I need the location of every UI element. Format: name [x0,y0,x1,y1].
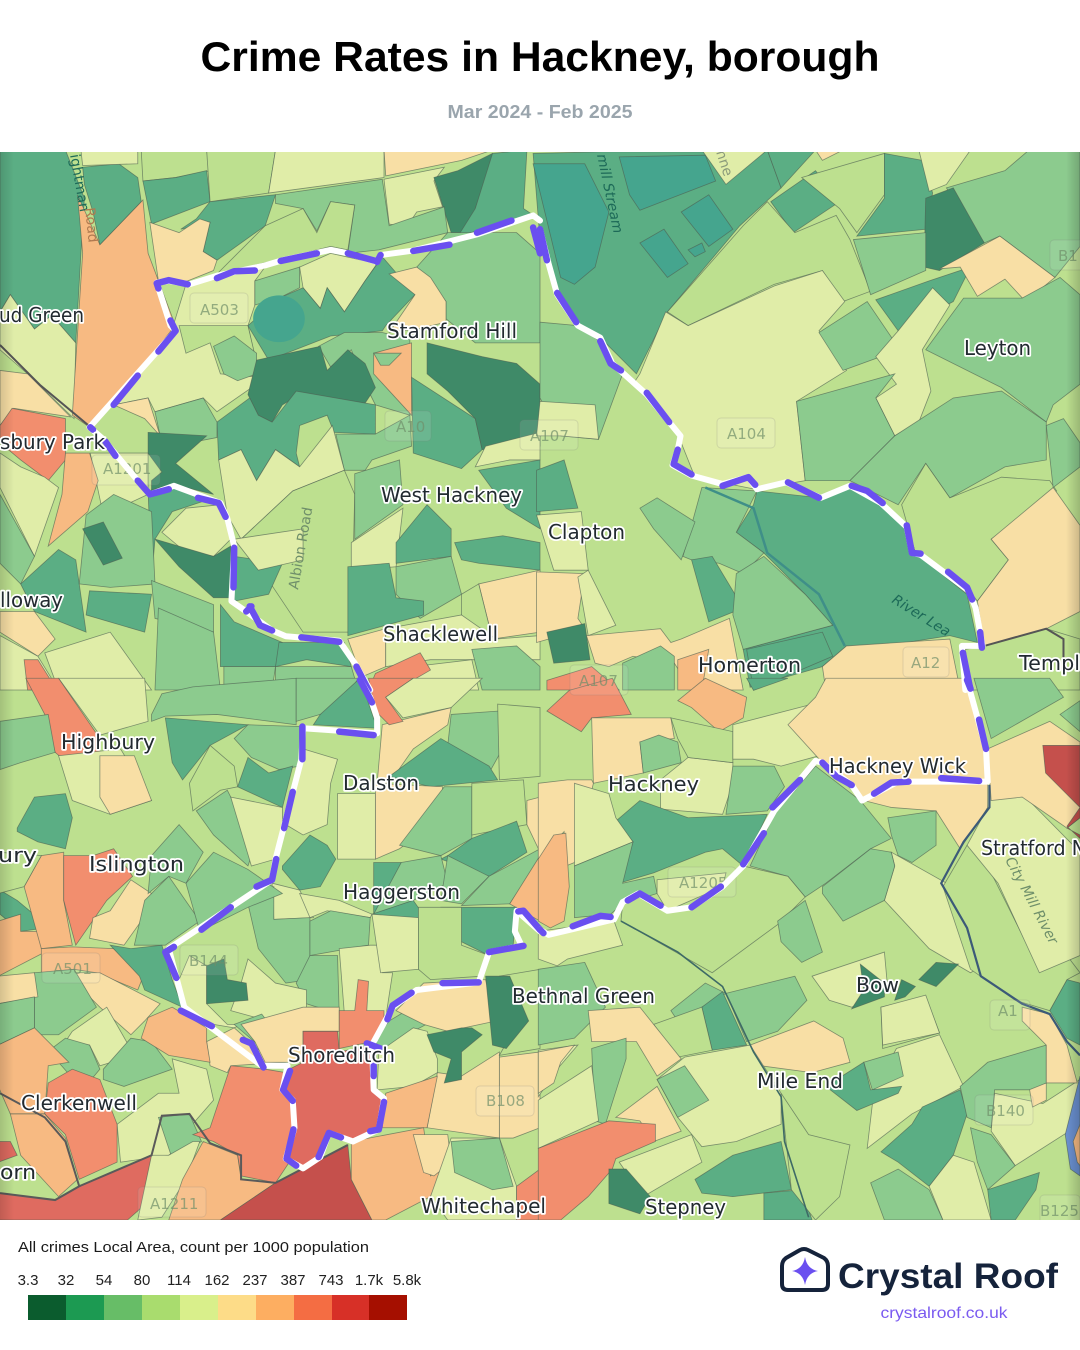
place name labels: Shacklewell [383,622,498,646]
road labels: B140 [986,1102,1025,1120]
icon: house with star [782,1249,828,1290]
place name labels: Clapton [548,520,625,544]
legend value labels: 743 [318,1272,344,1289]
place name labels: Stepney [645,1195,726,1219]
legend value labels: 54 [96,1272,112,1289]
road labels: A1 [998,1002,1018,1020]
waterway and street labels [66,148,1061,948]
road labels: A1201 [103,460,151,478]
road labels: A12 [911,654,940,672]
road labels [42,240,1080,1225]
waterway and street labels: Road [81,207,101,243]
place name labels: Mile End [757,1069,843,1093]
borough boundary: dashed purple and white line [90,215,988,1168]
legend value labels: 5.8k [393,1272,422,1289]
waterway and street labels: River Lea [889,592,953,640]
map areas: south-west [0,678,540,1220]
place name labels: Stamford Hill [387,319,517,343]
place name labels: Leyton [964,336,1031,360]
map edge shading [0,152,1080,1220]
legend value labels: 237 [242,1272,268,1289]
legend [18,1239,422,1320]
place name labels: sbury Park [0,430,105,454]
place name labels: orn [0,1160,36,1184]
road labels: A104 [727,425,766,443]
waterway and street labels: nne [712,148,736,178]
legend title: All crimes Local Area, count per 1000 population [18,1239,369,1256]
legend value labels [18,1272,422,1289]
road labels: B125 [1040,1202,1079,1220]
place name labels: Haggerston [343,880,460,904]
road labels: A107 [579,672,618,690]
map areas: north-east [533,150,1080,690]
choropleth map panel [0,148,1080,1225]
road labels: B144 [189,952,228,970]
map areas: south-east [538,678,1080,1220]
place name labels: Bethnal Green [512,984,655,1008]
place name labels: Bow [856,973,899,997]
waterway and street labels: ightman [66,153,92,213]
website: crystalroof.co.uk [880,1305,1009,1322]
legend value labels: 1.7k [355,1272,384,1289]
road labels: A1205 [679,874,727,892]
logo wordmark: Crystal Roof [838,1257,1058,1296]
place name labels [0,303,1080,1219]
place name labels: lloway [0,588,63,612]
place name labels: ud Green [0,303,84,327]
legend value labels: 32 [58,1272,74,1289]
road labels: A10 [396,418,425,436]
place name labels: Shoreditch [288,1043,395,1067]
map areas: north-west [0,150,540,690]
road labels: A107 [530,427,569,445]
road labels: A1211 [150,1195,198,1213]
place name labels: Hackney Wick [829,754,966,778]
railway line [0,345,88,425]
legend value labels: 162 [204,1272,230,1289]
legend value labels: 80 [134,1272,150,1289]
place name labels: Whitechapel [421,1194,546,1218]
waterway and street labels: Albion Road [286,506,316,591]
road labels: A503 [200,301,239,319]
place name labels: West Hackney [381,483,522,507]
place name labels: Dalston [343,771,419,795]
waterway and street labels: mill Stream [593,153,626,235]
road labels: B1 [1058,247,1078,265]
logo: Crystal Roof [782,1249,1058,1322]
subtitle: date range: Mar 2024 - Feb 2025 [448,102,632,122]
legend value labels: 114 [167,1272,191,1289]
legend value labels: 387 [280,1272,306,1289]
place name labels: Homerton [698,653,801,677]
legend colour scale [28,1295,407,1320]
road labels: B108 [486,1092,525,1110]
place name labels: Templ [1018,651,1080,675]
legend value labels: 3.3 [18,1272,38,1289]
title: Crime Rates in Hackney, borough [200,33,880,80]
place name labels: Hackney [608,772,699,796]
waterway and street labels: City Mill River [1001,854,1061,948]
place name labels: Islington [89,852,184,876]
place name labels: Highbury [61,730,155,754]
place name labels: Clerkenwell [21,1091,137,1115]
road labels: A501 [53,960,92,978]
